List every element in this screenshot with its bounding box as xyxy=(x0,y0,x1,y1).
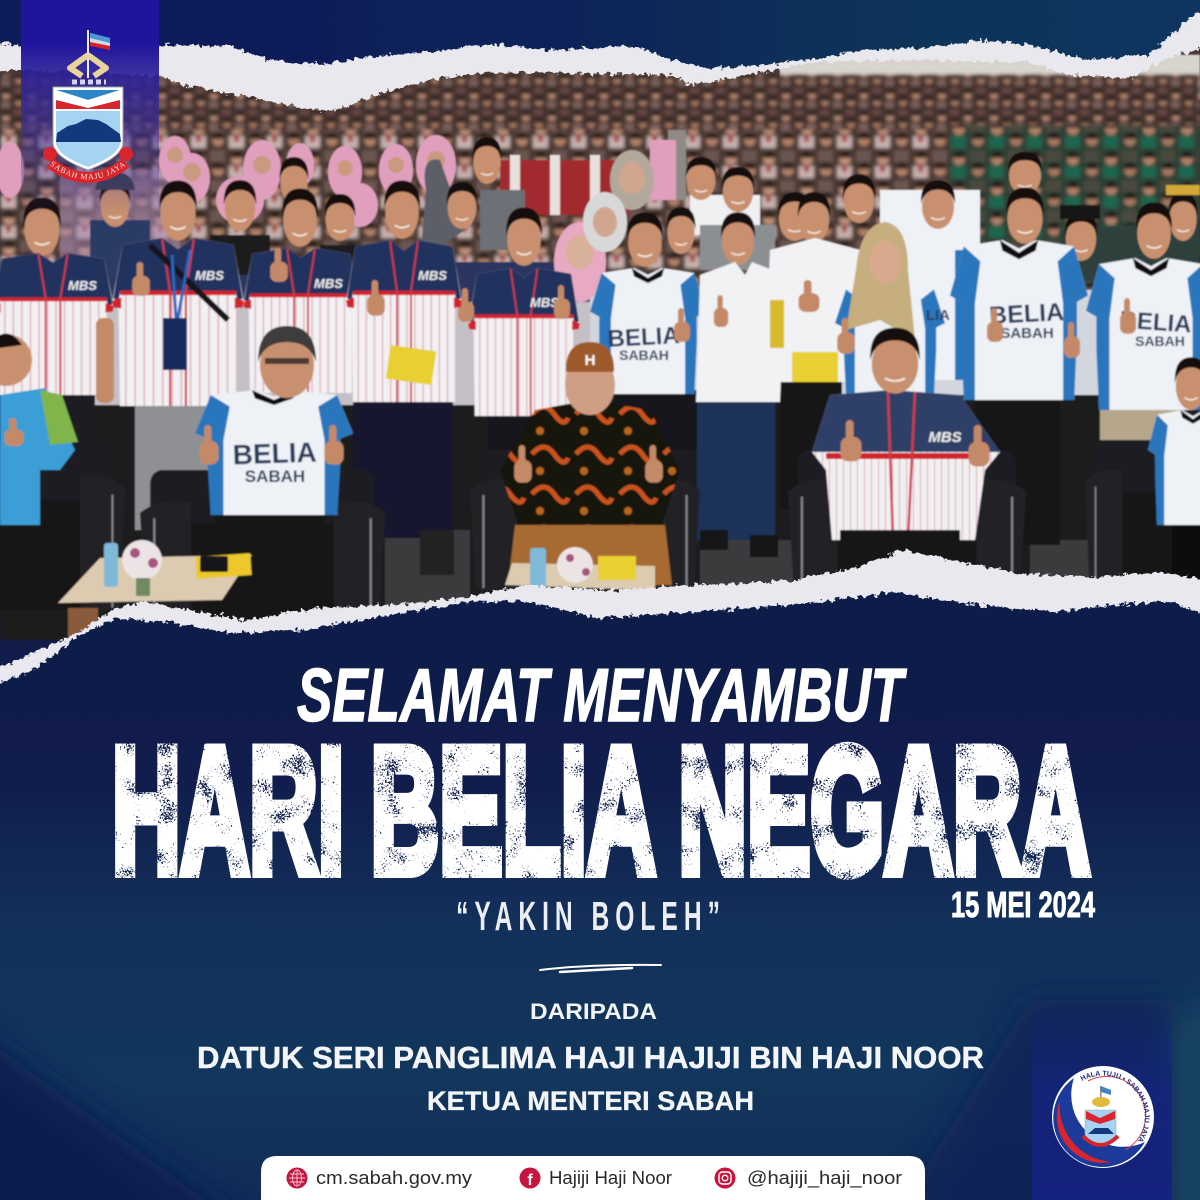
crowd: middle rows xyxy=(0,130,1000,300)
crowd rows, softened xyxy=(0,75,1200,300)
woman in gold hijab xyxy=(835,222,950,395)
floor patches xyxy=(385,530,1095,620)
hall wall, top right xyxy=(780,55,1200,100)
mini crest xyxy=(1083,1086,1118,1146)
pink hijab students xyxy=(0,135,676,227)
website: cm.sabah.gov.my xyxy=(316,1168,472,1188)
armchairs xyxy=(0,440,1200,620)
crescent: red xyxy=(1057,1100,1112,1163)
MBS jersey guest 2: MBS xyxy=(195,268,224,283)
Sabah crest, top left xyxy=(43,30,133,183)
Belia Sabah jersey guest A: SABAH xyxy=(619,347,669,363)
MBS jersey guest 4 xyxy=(346,180,462,575)
hijab woman behind xyxy=(554,222,606,302)
top-left logo panel xyxy=(21,0,159,215)
back row guests, left xyxy=(90,137,525,285)
MBS jersey guest 5 xyxy=(458,207,580,520)
MBS jersey guest 1 xyxy=(0,197,114,480)
Belia Sabah jersey guest C: BELIA xyxy=(1119,307,1192,338)
Belia jersey guest behind hijab woman xyxy=(900,230,980,380)
Belia Sabah jersey guest C xyxy=(1086,202,1200,475)
jerseys filling the gaps in the standing row xyxy=(0,262,1200,405)
shield xyxy=(53,87,123,170)
MBS jersey guest 5: MBS xyxy=(530,295,559,310)
flag and pole xyxy=(87,30,110,78)
white uniform official xyxy=(696,212,785,557)
back row guests, right xyxy=(583,150,1200,280)
crescent: blue xyxy=(1053,1078,1145,1167)
bottom-right logo panel xyxy=(1032,1000,1172,1200)
motto ribbon: SABAH MAJU JAYA xyxy=(50,162,126,180)
slogan: “YAKIN BOLEH” xyxy=(456,894,726,940)
Hala Tuju round logo: HALA TUJU • SABAH MAJU JAYA xyxy=(1080,1070,1150,1142)
facebook name: Hajiji Haji Noor xyxy=(549,1168,672,1188)
curved motto xyxy=(1082,1076,1145,1158)
torn paper edge: bottom sheet xyxy=(0,550,1200,720)
brush stroke divider xyxy=(540,965,661,972)
white shirt official behind xyxy=(765,192,860,510)
Hala Tuju round logo xyxy=(1052,1066,1154,1168)
text: name of Chief Minister: DATUK SERI PANGLIMA HAJI HAJIJI BIN HAJI NOOR xyxy=(197,1040,984,1075)
text: Daripada: DARIPADA xyxy=(530,999,657,1024)
seated guest in batik shirt and brown cap: H xyxy=(585,352,595,369)
icon: facebook: f xyxy=(527,1172,533,1189)
MBS jersey guest 3: MBS xyxy=(314,276,343,291)
MBS jersey guest 3 xyxy=(243,188,359,393)
side table, centre xyxy=(505,547,655,593)
jewel row xyxy=(72,80,106,84)
seated guest in batik shirt and brown cap xyxy=(500,342,680,585)
red and white uniforms xyxy=(500,155,630,215)
Belia Sabah jersey guest B: SABAH xyxy=(1000,325,1054,342)
crowd: back rows xyxy=(0,75,1200,140)
seated guest in MBS jersey xyxy=(812,328,1000,590)
woman in gold hijab: LIA xyxy=(926,307,950,324)
lilac haze behind left guests xyxy=(60,170,180,260)
arms holding the pole xyxy=(70,55,106,76)
student faces xyxy=(167,147,445,181)
Belia Sabah jersey guest A xyxy=(590,212,706,450)
crowd: green shirts, right xyxy=(950,125,1200,300)
instagram handle: @hajiji_haji_noor xyxy=(747,1168,902,1189)
seated guest in Belia Sabah jersey: SABAH xyxy=(245,467,305,486)
seated guest in Belia Sabah jersey xyxy=(195,326,353,620)
text: title: KETUA MENTERI SABAH xyxy=(427,1086,754,1116)
Belia Sabah jersey guest C: SABAH xyxy=(1135,333,1185,349)
hall backdrop xyxy=(0,40,1200,620)
seated guest far right xyxy=(1148,357,1200,585)
date: 15 MEI 2024 xyxy=(951,884,1095,925)
background texture wedges xyxy=(0,990,1200,1200)
icon: instagram xyxy=(714,1168,736,1188)
MBS jersey guest 1: MBS xyxy=(68,278,97,293)
arc line xyxy=(1088,1076,1146,1150)
seated guest far left in batik xyxy=(0,334,78,525)
Belia Sabah jersey guest A: BELIA xyxy=(607,322,680,353)
Belia Sabah jersey guest B xyxy=(950,187,1088,545)
seated guest in Belia Sabah jersey: BELIA xyxy=(232,437,317,470)
side table, left xyxy=(58,540,252,638)
icon: globe xyxy=(286,1168,308,1188)
lower navy background xyxy=(0,600,1200,1200)
icon: facebook xyxy=(520,1168,540,1189)
Belia Sabah jersey guest B: BELIA xyxy=(988,298,1065,330)
photo: audience and guests xyxy=(0,40,1200,640)
MBS jersey guest 2 xyxy=(112,181,244,530)
heading: Selamat Menyambut: SELAMAT MENYAMBUT xyxy=(297,653,907,737)
aisle xyxy=(668,130,686,200)
seated guest in MBS jersey: MBS xyxy=(928,429,962,446)
torn paper edge: top band xyxy=(0,0,1200,112)
MBS jersey guest 4: MBS xyxy=(418,268,447,283)
contact bar xyxy=(261,1156,925,1200)
motto ribbon xyxy=(43,147,133,183)
floor and dark lower background xyxy=(0,395,1200,640)
